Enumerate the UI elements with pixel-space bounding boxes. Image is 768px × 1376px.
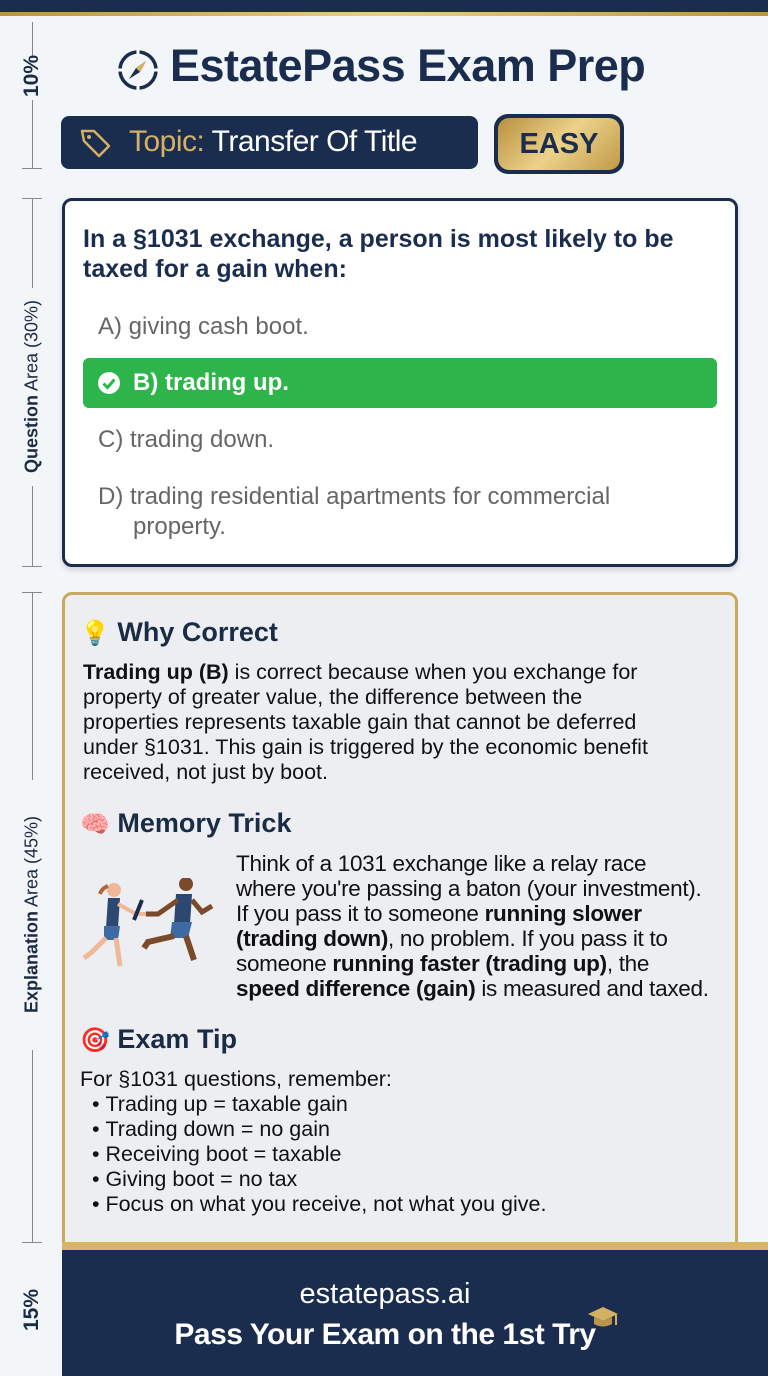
- footer: [62, 1242, 768, 1376]
- icon: check: [98, 372, 120, 394]
- icon: relay runners: [82, 878, 214, 966]
- heading: why correct: 💡 Why Correct: [80, 617, 278, 647]
- text: Explanation Area (45%): [22, 816, 42, 1013]
- text: exam tip: • Focus on what you receive, not what you give.: [92, 1192, 546, 1216]
- text: 10%: [20, 55, 43, 97]
- badge: EASY: [494, 114, 624, 174]
- text: memory trick: (trading down), no problem. If you pass it to: [236, 926, 668, 951]
- text: Question Area (30%): [22, 300, 42, 473]
- option D: [98, 483, 610, 540]
- icon: tag: [80, 130, 110, 158]
- topic pill: [61, 116, 478, 169]
- option B correct: [83, 358, 717, 408]
- rail: 15%: 15%: [20, 1289, 43, 1331]
- option C: C) trading down.: [98, 426, 274, 453]
- text: memory trick: speed difference (gain) is measured and taxed.: [236, 976, 709, 1001]
- text: why correct: Trading up (B) is correct because when you exchange for property of greater value, the difference between the properties represents taxable gain that cannot be deferred under §1031. This gain is triggered by the economic benefit received, not just by boot.: [83, 660, 648, 784]
- panel: explanation: [62, 592, 738, 1252]
- text: exam tip: • Trading down = no gain: [92, 1117, 330, 1141]
- text: exam tip: • Trading up = taxable gain: [92, 1092, 348, 1116]
- heading: exam tip: 🎯 Exam Tip: [80, 1024, 237, 1054]
- text: memory trick: [236, 851, 709, 1001]
- text: memory trick: If you pass it to someone running slower: [236, 901, 642, 926]
- question text: In a §1031 exchange, a person is most likely to be taxed for a gain when:: [83, 225, 674, 283]
- text: exam tip: • Giving boot = no tax: [92, 1167, 297, 1191]
- option D: D) trading residential apartments for commercial: [98, 483, 610, 510]
- heading: memory trick: 🧠 Memory Trick: [80, 808, 291, 838]
- option B correct: B) trading up.: [133, 369, 289, 396]
- option A: A) giving cash boot.: [98, 313, 309, 340]
- panel: question: [62, 198, 738, 567]
- footer url: estatepass.ai: [300, 1278, 470, 1310]
- text: memory trick: where you're passing a baton (your investment).: [236, 876, 701, 901]
- icon: compass: [118, 50, 158, 90]
- topic pill: Topic: Transfer Of Title: [129, 125, 417, 158]
- title: EstatePass Exam Prep: [170, 40, 645, 91]
- text: memory trick: Think of a 1031 exchange like a relay race: [236, 851, 646, 876]
- text: exam tip: [80, 1067, 546, 1216]
- icon: grad cap: [588, 1307, 618, 1326]
- text: memory trick: someone running faster (trading up), the: [236, 951, 649, 976]
- text: exam tip: • Receiving boot = taxable: [92, 1142, 342, 1166]
- badge: EASY: EASY: [520, 128, 598, 160]
- text: exam tip: For §1031 questions, remember:: [80, 1067, 392, 1091]
- top bar: [0, 0, 768, 12]
- footer tagline: Pass Your Exam on the 1st Try: [174, 1318, 596, 1351]
- option D: property.: [133, 513, 226, 540]
